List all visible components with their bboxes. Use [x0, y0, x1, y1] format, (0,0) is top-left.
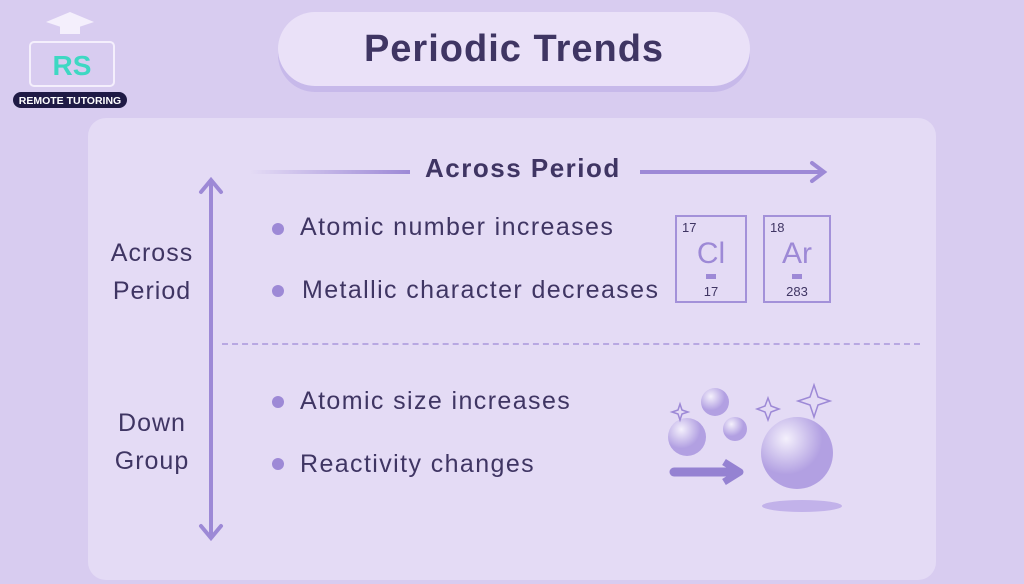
dashed divider: [222, 343, 920, 345]
label: down group: [115, 409, 189, 475]
element tiles: 17: [682, 220, 696, 235]
element tiles: Cl: [697, 237, 725, 270]
vertical arrow: [198, 177, 224, 541]
label: down group: Group: [115, 447, 189, 475]
icon: atoms growing: [668, 383, 842, 512]
bullets top: Atomic number increases: [300, 213, 614, 241]
logo: RS: [53, 50, 91, 81]
bullets bottom: [272, 387, 571, 478]
bullets top: Metallic character decreases: [302, 276, 659, 304]
element tiles: Ar: [782, 237, 812, 270]
title pill: [278, 12, 750, 86]
element tiles: [675, 215, 831, 303]
bullets bottom: Atomic size increases: [300, 387, 571, 415]
label: across period: [110, 239, 193, 305]
bullets bottom: Reactivity changes: [300, 450, 535, 478]
label: across period: Across: [111, 239, 193, 267]
logo: [13, 12, 127, 108]
element tiles: 17: [704, 284, 718, 299]
across period header: [266, 153, 828, 184]
label: down group: Down: [118, 409, 186, 437]
element tiles: 283: [786, 284, 808, 299]
title pill: Periodic Trends: [364, 28, 664, 70]
element tiles: 18: [770, 220, 784, 235]
bullets top: [272, 213, 659, 304]
logo: REMOTE TUTORING: [19, 95, 121, 107]
main panel: [88, 118, 936, 580]
across period header: Across Period: [425, 153, 621, 183]
label: across period: Period: [113, 277, 191, 305]
